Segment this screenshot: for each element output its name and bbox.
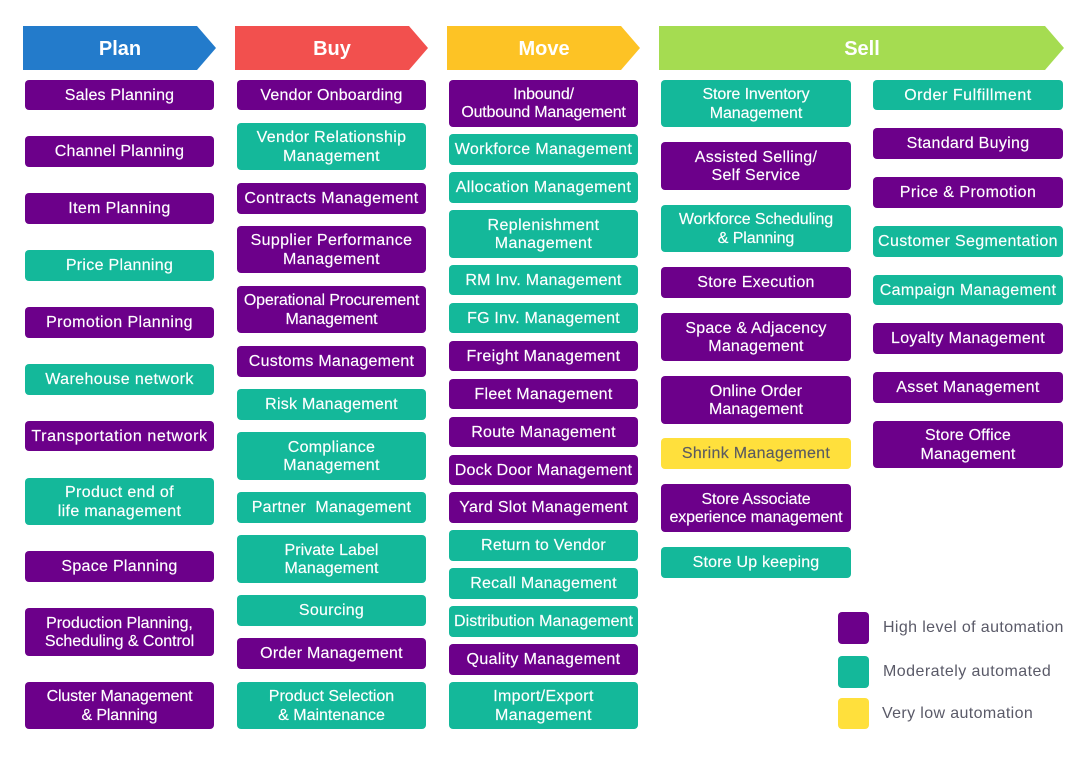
Price Planning [25,250,214,281]
Asset Management [873,372,1063,403]
Supplier Performance Management: Management [283,250,380,268]
Private Label Management [237,535,426,583]
Price & Promotion: Price & Promotion [900,184,1036,201]
arrow header: Move [447,26,640,70]
arrow header: Move: Move [518,38,570,60]
Warehouse network [25,364,214,395]
Workforce Management [449,134,638,165]
Yard Slot Management [449,492,638,523]
Customer Segmentation [873,226,1063,257]
RM Inv. Management [449,265,638,295]
Transportation network: Transportation network [31,428,208,445]
Freight Management [449,341,638,371]
Promotion Planning: Promotion Planning [46,314,193,331]
Product end of life management: life management [58,502,181,520]
Quality Management [449,644,638,675]
Quality Management: Quality Management [467,651,620,668]
Workforce Scheduling & Planning: & Planning [718,230,794,246]
Risk Management: Risk Management [265,396,398,413]
arrow header: Buy: Buy [313,38,351,60]
Contracts Management [237,183,426,214]
panel: Move column [449,80,638,729]
Campaign Management: Campaign Management [880,282,1056,299]
Import/Export Management: Import/Export [493,688,594,705]
Customs Management [237,346,426,377]
Allocation Management [449,172,638,203]
Import/Export Management: Management [495,706,592,724]
legend swatch: high automation [838,612,869,644]
Cluster Management & Planning [25,682,214,729]
Product Selection & Maintenance: Product Selection [269,688,394,705]
Route Management [449,417,638,447]
Private Label Management: Private Label [284,542,379,558]
Space & Adjacency Management: Management [708,338,804,355]
Store Associate experience management: experience management [670,509,842,526]
legend swatch: very low automation [838,698,869,729]
panel: Sell column 1 [661,80,851,578]
Store Associate experience management [661,484,851,532]
Dock Door Management: Dock Door Management [455,462,632,479]
Shrink Management: Shrink Management [682,445,830,462]
Standard Buying: Standard Buying [907,135,1029,152]
Order Management: Order Management [260,645,403,662]
Compliance Management [237,432,426,480]
Workforce Scheduling & Planning [661,205,851,252]
legend label: very low automation: Very low automation [882,705,1033,722]
Fleet Management: Fleet Management [474,386,613,403]
legend swatch: moderately automated [838,656,869,688]
Replenishment Management [449,210,638,258]
Compliance Management: Management [283,457,380,474]
panel: Sell column 2 [873,80,1063,468]
Production Planning, Scheduling & Control: Production Planning, [46,614,193,632]
Product end of life management [25,478,214,525]
Sourcing [237,595,426,626]
Store Inventory Management [661,80,851,127]
Distribution Management [449,606,638,637]
Space & Adjacency Management: Space & Adjacency [685,320,827,336]
Online Order Management [661,376,851,424]
Recall Management: Recall Management [470,575,617,592]
Product Selection & Maintenance [237,682,426,729]
Space Planning: Space Planning [61,558,178,575]
Campaign Management [873,275,1063,305]
Transportation network [25,421,214,451]
Production Planning, Scheduling & Control [25,608,214,656]
Inbound/Outbound Management [449,80,638,127]
arrow header: Buy [235,26,428,70]
Store Up keeping: Store Up keeping [693,554,819,571]
Store Associate experience management: Store Associate [702,490,810,508]
arrow header: Sell: Sell [844,38,880,60]
Distribution Management: Distribution Management [454,613,633,630]
legend label: high automation: High level of automation [883,619,1064,636]
Space & Adjacency Management [661,313,851,361]
Allocation Management: Allocation Management [456,179,631,196]
Supplier Performance Management: Supplier Performance [251,232,412,249]
Contracts Management: Contracts Management [244,190,419,207]
Item Planning: Item Planning [68,200,171,217]
legend label: moderately automated: Moderately automated [883,663,1051,680]
Private Label Management: Management [285,560,378,577]
Supplier Performance Management [237,226,426,273]
Product end of life management: Product end of [65,484,174,501]
Operational Procurement Management [237,286,426,333]
Replenishment Management: Replenishment [488,216,599,234]
Shrink Management [661,438,851,469]
Assisted Selling/Self Service: Self Service [712,167,800,184]
Asset Management: Asset Management [896,379,1040,396]
Price & Promotion [873,177,1063,208]
FG Inv. Management [449,303,638,333]
Operational Procurement Management: Management [286,310,377,328]
Item Planning [25,193,214,224]
Channel Planning: Channel Planning [55,143,184,160]
Warehouse network: Warehouse network [45,371,194,388]
Assisted Selling/Self Service [661,142,851,190]
panel: Buy column [237,80,426,729]
Space Planning [25,551,214,582]
Cluster Management & Planning: & Planning [82,706,157,724]
Standard Buying [873,128,1063,159]
Vendor Relationship Management: Management [283,148,380,164]
Dock Door Management [449,455,638,485]
Store Office Management [873,421,1063,468]
Production Planning, Scheduling & Control: Scheduling & Control [45,633,194,650]
Order Fulfillment: Order Fulfillment [904,87,1032,104]
Store Up keeping [661,547,851,578]
Vendor Onboarding: Vendor Onboarding [260,87,403,104]
Import/Export Management [449,682,638,729]
Return to Vendor [449,530,638,561]
Promotion Planning [25,307,214,338]
Operational Procurement Management: Operational Procurement [244,292,419,309]
Store Office Management: Management [921,446,1015,462]
Store Execution [661,267,851,298]
Vendor Onboarding [237,80,426,110]
Store Inventory Management: Management [710,104,802,122]
Fleet Management [449,379,638,409]
arrow header: Plan: Plan [99,38,141,60]
Recall Management [449,568,638,599]
Product Selection & Maintenance: & Maintenance [278,706,385,724]
Store Execution: Store Execution [697,274,815,291]
Customer Segmentation: Customer Segmentation [878,233,1058,250]
Route Management: Route Management [471,424,616,441]
Partner Management: Partner Management [252,499,411,516]
Inbound/Outbound Management: Outbound Management [461,104,626,120]
Yard Slot Management: Yard Slot Management [459,499,628,516]
Assisted Selling/Self Service: Assisted Selling/ [695,148,817,166]
Partner Management [237,492,426,523]
arrow header: Plan [23,26,216,70]
Vendor Relationship Management: Vendor Relationship [257,129,406,146]
Store Inventory Management: Store Inventory [702,86,810,103]
Cluster Management & Planning: Cluster Management [47,688,192,705]
legend [838,612,1064,729]
Workforce Management: Workforce Management [455,141,632,158]
Store Office Management: Store Office [925,427,1011,444]
Channel Planning [25,136,214,167]
Sourcing: Sourcing [299,602,364,619]
Loyalty Management [873,323,1063,354]
Customs Management: Customs Management [249,353,414,370]
Loyalty Management: Loyalty Management [891,330,1045,347]
FG Inv. Management: FG Inv. Management [467,310,620,327]
Sales Planning: Sales Planning [65,87,174,104]
Inbound/Outbound Management: Inbound/ [513,86,574,102]
Return to Vendor: Return to Vendor [481,537,606,554]
arrow header: Sell [659,26,1064,70]
Sales Planning [25,80,214,110]
RM Inv. Management: RM Inv. Management [465,272,622,289]
Vendor Relationship Management [237,123,426,170]
Freight Management: Freight Management [467,348,620,365]
Replenishment Management: Management [495,235,592,252]
Online Order Management: Online Order [710,382,802,400]
Workforce Scheduling & Planning: Workforce Scheduling [679,211,833,228]
Order Fulfillment [873,80,1063,110]
Risk Management [237,389,426,420]
Order Management [237,638,426,669]
Compliance Management: Compliance [288,438,375,456]
panel: Plan column [25,80,214,729]
Online Order Management: Management [709,401,803,418]
Price Planning: Price Planning [66,257,173,274]
